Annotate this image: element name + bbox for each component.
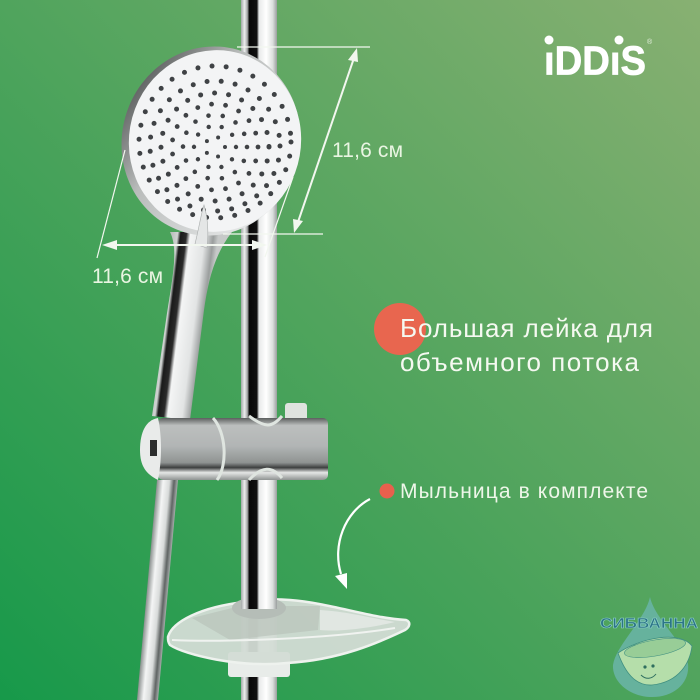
- head hook detail: [195, 205, 208, 248]
- top extension line: [237, 46, 370, 48]
- left slanted line: [97, 150, 125, 258]
- watermark tub: [618, 637, 692, 685]
- headline: объемного потока: [400, 347, 640, 377]
- dimension: head width: [97, 150, 293, 258]
- watermark: Sibvanna: [600, 597, 698, 697]
- watermark drop: [613, 597, 688, 697]
- height arrow: [293, 48, 358, 233]
- head white face: [115, 36, 315, 246]
- callout text: Мыльница в комплекте: [400, 480, 648, 503]
- shower handle: [152, 232, 232, 420]
- shower hose: [137, 480, 178, 700]
- arrow: to soap dish: [335, 499, 370, 589]
- bottom extension line: [223, 233, 323, 235]
- watermark tub inner: [623, 635, 687, 661]
- watermark name: СИБВАННА: [600, 615, 698, 632]
- headline: [400, 313, 653, 377]
- shower rail: [241, 0, 277, 700]
- right slanted line: [265, 177, 293, 257]
- dish body: [168, 599, 409, 664]
- bracket body: [158, 418, 328, 480]
- head chrome rim: [99, 25, 323, 257]
- label: height: 11,6 см: [332, 139, 403, 162]
- bracket button: [285, 403, 307, 421]
- shower head: [99, 25, 323, 257]
- logo dots: [544, 36, 554, 44]
- dish rail hole: [232, 597, 286, 619]
- soap dish: [168, 585, 409, 677]
- dish inner shade: [192, 606, 320, 640]
- watermark face: [641, 664, 656, 678]
- dish front lip: [172, 628, 395, 641]
- registered mark: ®: [647, 38, 653, 46]
- bracket end cap: [140, 418, 161, 480]
- width arrow: [102, 240, 267, 250]
- callout: soap dish: [380, 480, 648, 503]
- accent circle: [374, 303, 426, 355]
- logo: [544, 36, 653, 84]
- bracket slot: [150, 440, 157, 456]
- headline: Большая лейка для: [400, 313, 653, 343]
- transparent clips: [213, 416, 282, 480]
- callout dot: [380, 484, 394, 498]
- label: width: 11,6 см: [92, 265, 163, 288]
- logo wordmark: ıDDıS: [544, 38, 646, 84]
- spray nozzles: [139, 66, 291, 218]
- sliding bracket: [140, 403, 328, 480]
- dimension: head height: [223, 47, 370, 234]
- dish collar: [228, 652, 290, 677]
